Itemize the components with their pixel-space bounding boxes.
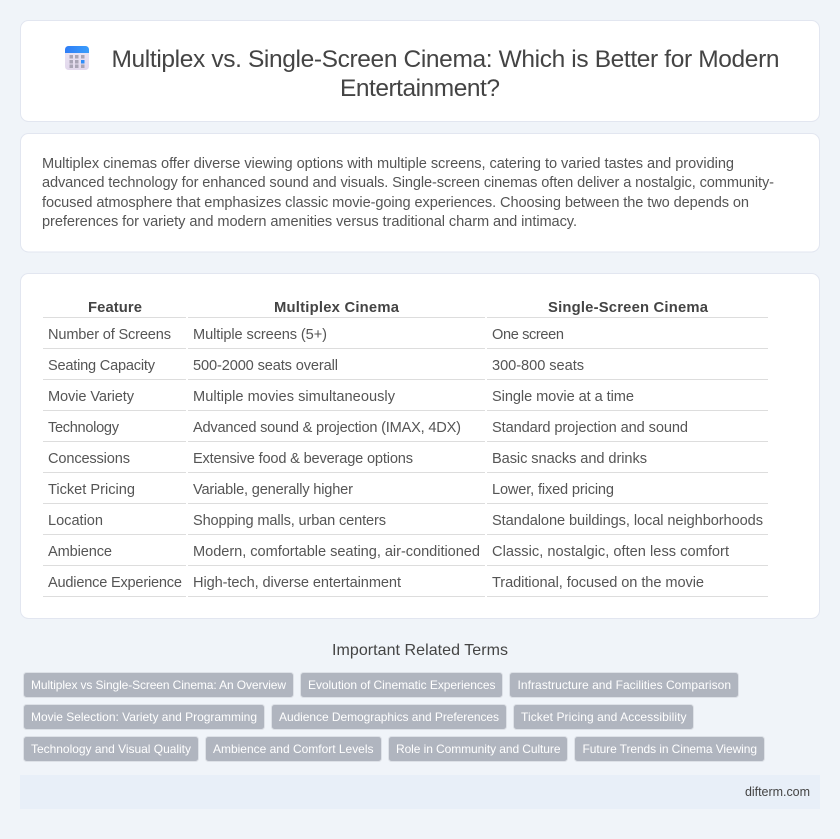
tag: Ambience and Comfort Levels (213, 742, 374, 756)
row: location: Location (48, 513, 103, 529)
panel: description (20, 134, 820, 252)
row: ambience: Modern, comfortable seating, air-conditioned (193, 544, 480, 560)
footer bar: difterm.com (745, 785, 810, 799)
row: number of screens: Multiple screens (5+) (193, 327, 327, 343)
tag: Ticket Pricing and Accessibility (521, 710, 686, 724)
tag (206, 736, 382, 762)
row: movie variety: Single movie at a time (492, 389, 634, 405)
row: ticket pricing: Variable, generally higher (193, 482, 353, 498)
row: audience experience: Traditional, focused on the movie (492, 575, 704, 591)
title (112, 46, 780, 102)
row: ambience: Classic, nostalgic, often less comfort (492, 544, 729, 560)
row: audience experience: High-tech, diverse entertainment (193, 575, 401, 591)
row: movie variety: Movie Variety (48, 389, 135, 405)
tag group: related terms (24, 672, 764, 762)
text block: description: Multiplex cinemas offer diverse viewing options with multiple screens, catering to varied tastes and providing (42, 156, 734, 172)
text block: description (42, 156, 774, 230)
table header: Single-Screen Cinema (548, 300, 709, 316)
tag: Technology and Visual Quality (31, 742, 191, 756)
tag (24, 672, 294, 698)
tag (574, 736, 764, 762)
row: location: Shopping malls, urban centers (193, 513, 386, 529)
row: audience experience (48, 575, 704, 591)
row: ticket pricing: Ticket Pricing (48, 482, 135, 498)
tag (24, 704, 264, 730)
tag (510, 672, 738, 698)
title: Entertainment? (340, 75, 500, 102)
row: movie variety: Multiple movies simultaneously (193, 389, 396, 405)
tag (514, 704, 694, 730)
row: ticket pricing: Lower, fixed pricing (492, 482, 614, 498)
row: technology (48, 420, 688, 436)
row: location (48, 513, 763, 529)
row: number of screens (48, 327, 564, 343)
row: concessions: Concessions (48, 451, 130, 467)
row: seating capacity: 500-2000 seats overall (193, 358, 338, 374)
tag (24, 736, 198, 762)
tag: Infrastructure and Facilities Comparison (518, 678, 731, 692)
tag: Role in Community and Culture (396, 742, 561, 756)
row: concessions (48, 451, 647, 467)
text block: description: focused atmosphere that emphasizes classic movie-going experiences. Choosing between the two depends on (42, 195, 749, 211)
row: number of screens: One screen (492, 327, 564, 343)
tag (300, 672, 502, 698)
icon: calendar (65, 46, 89, 70)
panel: title card (20, 20, 820, 122)
title: Multiplex vs. Single-Screen Cinema: Which is Better for Modern (112, 46, 780, 73)
row: number of screens: Number of Screens (48, 327, 171, 343)
row: ambience: Ambience (48, 544, 112, 560)
tag: Audience Demographics and Preferences (279, 710, 499, 724)
footer bar (20, 775, 820, 809)
row: seating capacity (48, 358, 584, 374)
row: concessions: Basic snacks and drinks (492, 451, 647, 467)
row: ambience (48, 544, 729, 560)
tag (388, 736, 568, 762)
tag (272, 704, 506, 730)
tag: Multiplex vs Single-Screen Cinema: An Overview (31, 678, 286, 692)
row: concessions: Extensive food & beverage options (193, 451, 413, 467)
row: seating capacity: 300-800 seats (492, 358, 584, 374)
row: technology: Advanced sound & projection (IMAX, 4DX) (193, 420, 461, 436)
table header: Feature (88, 300, 142, 316)
row: technology: Technology (48, 420, 120, 436)
row: seating capacity: Seating Capacity (48, 358, 156, 374)
tag: Movie Selection: Variety and Programming (31, 710, 257, 724)
row: technology: Standard projection and sound (492, 420, 688, 436)
heading: important related terms: Important Related Terms (332, 642, 508, 659)
text block: description: advanced technology for enhanced sound and visuals. Single-screen cinemas often deliver a nostalgic, community- (42, 175, 774, 191)
tag: Future Trends in Cinema Viewing (582, 742, 757, 756)
panel: comparison table (20, 274, 820, 618)
row: movie variety (48, 389, 634, 405)
row: ticket pricing (48, 482, 614, 498)
text block: description: preferences for variety and modern amenities versus traditional charm and intimacy. (42, 214, 577, 230)
row: audience experience: Audience Experience (48, 575, 182, 591)
tag: Evolution of Cinematic Experiences (308, 678, 496, 692)
table header (88, 300, 709, 316)
row: location: Standalone buildings, local neighborhoods (492, 513, 763, 529)
table header: Multiplex Cinema (274, 300, 400, 316)
